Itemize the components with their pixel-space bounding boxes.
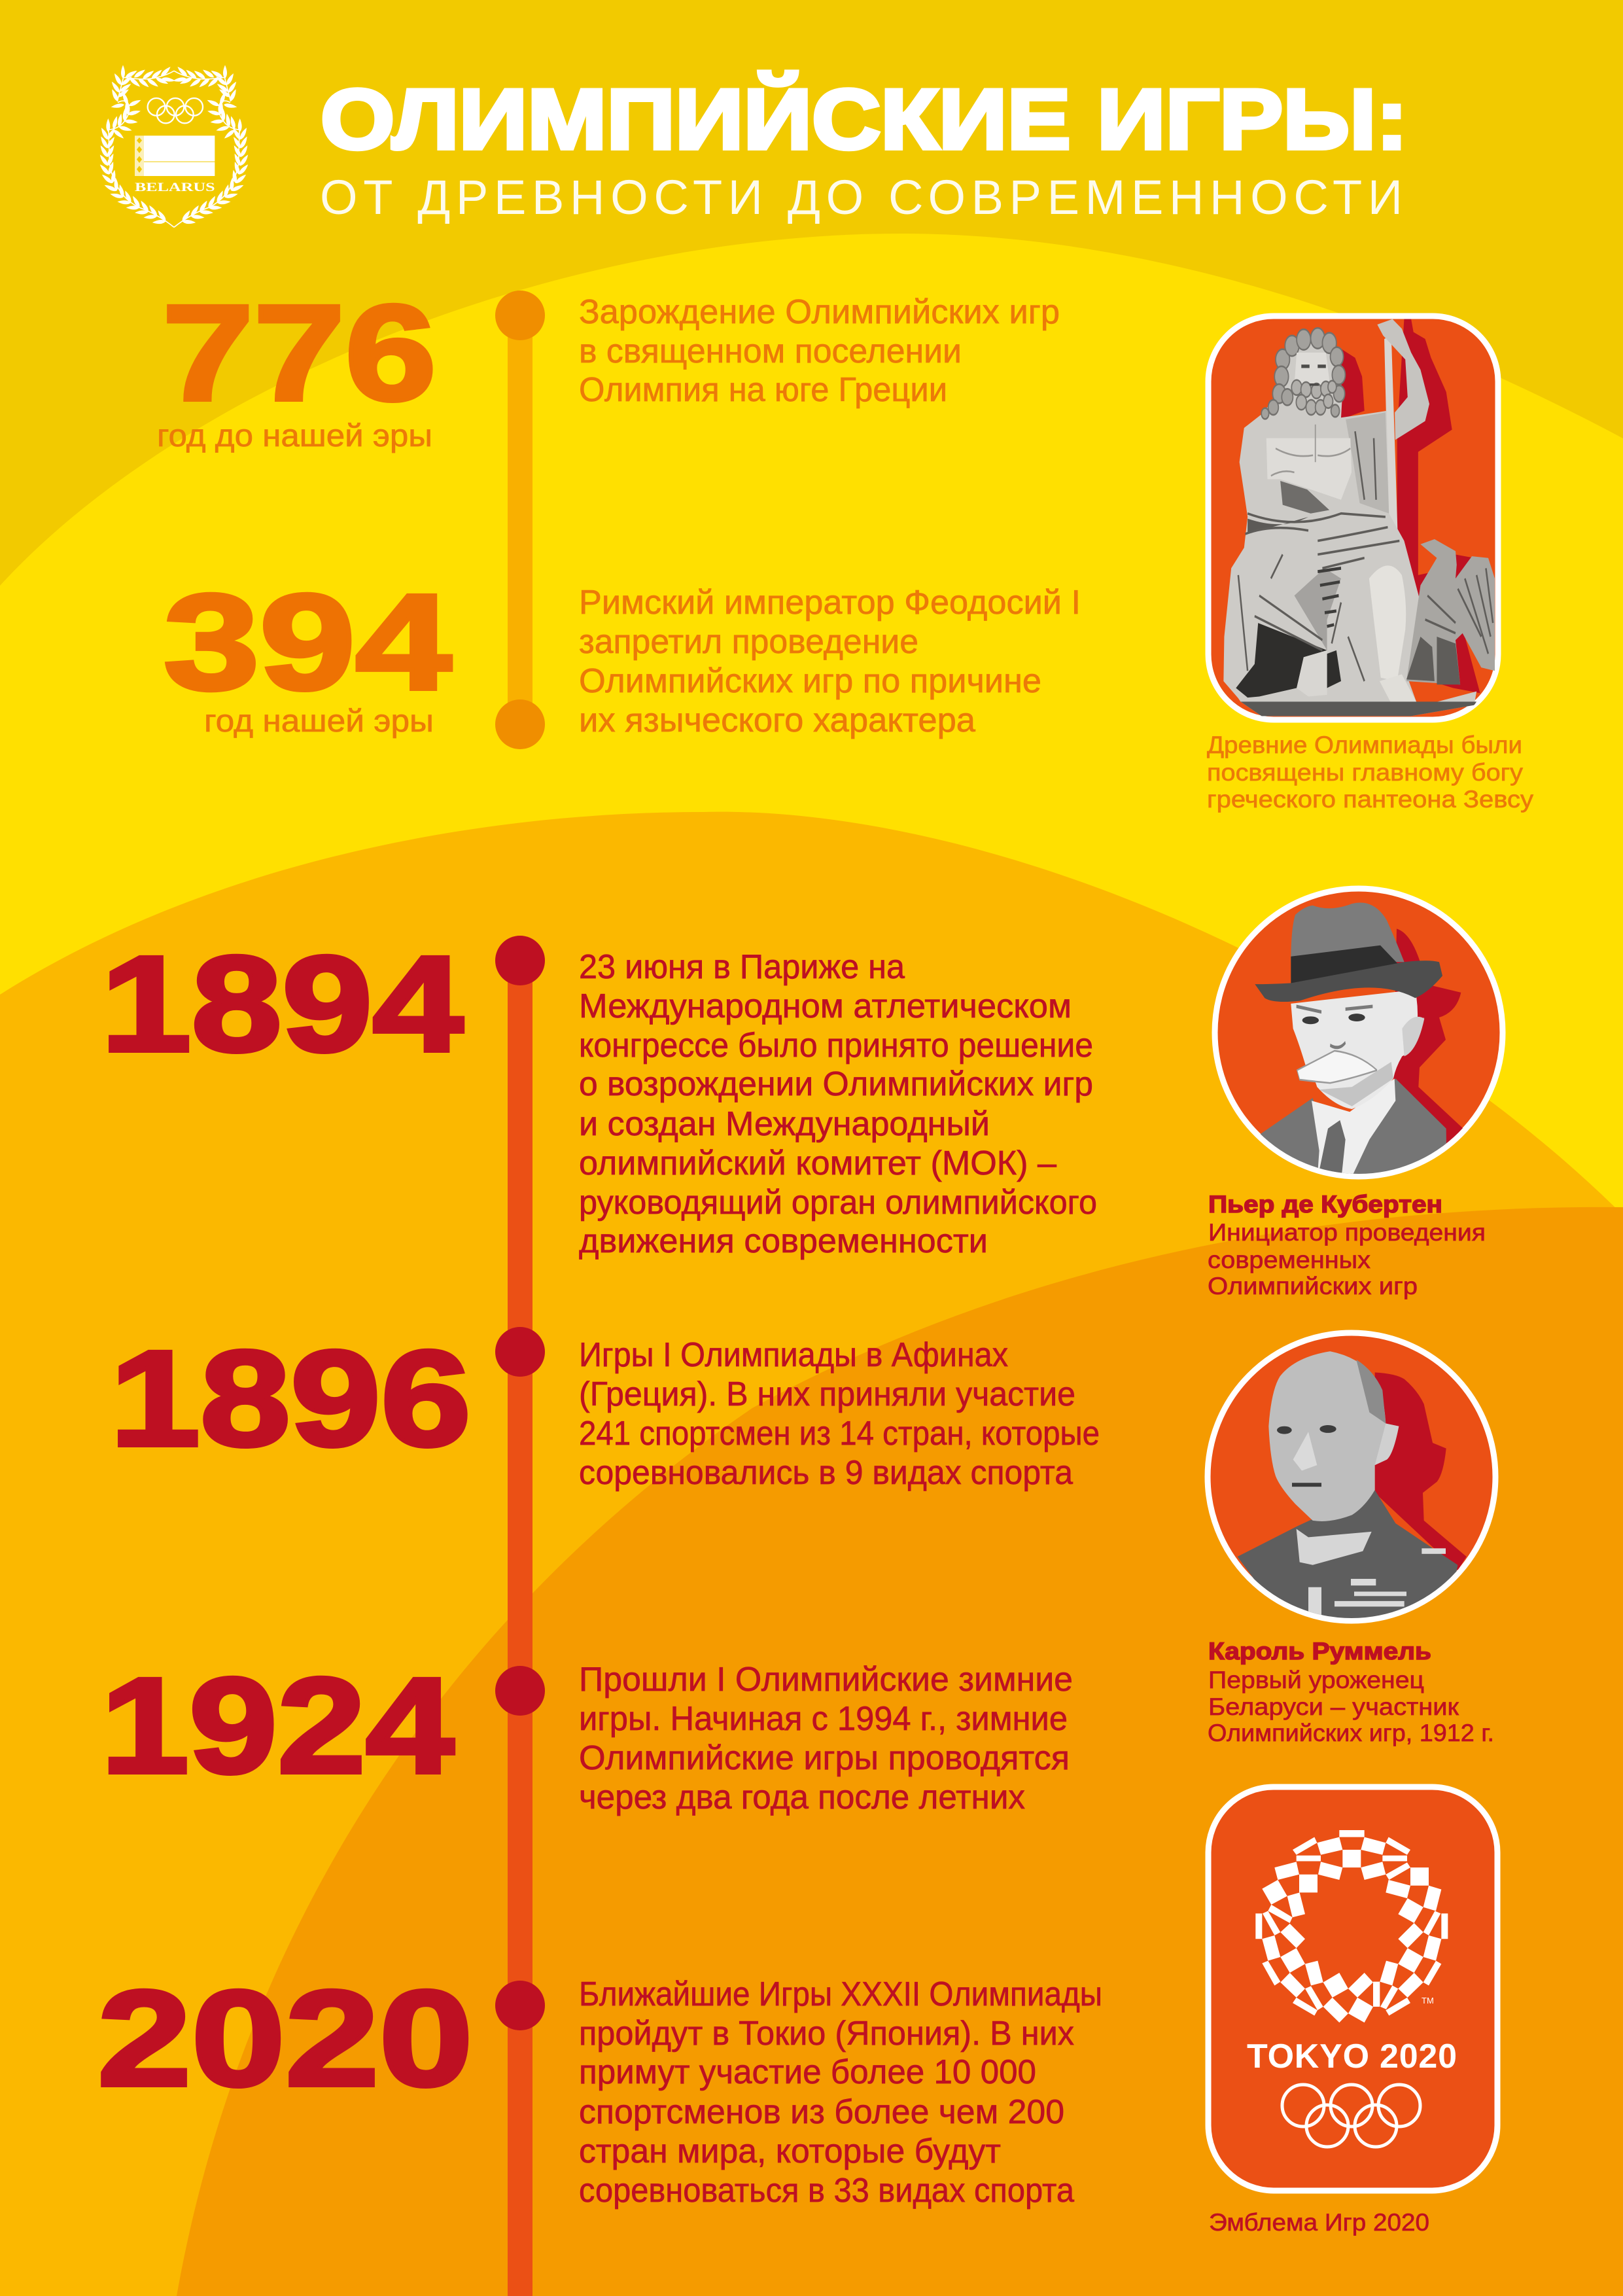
text block 2020	[579, 1975, 1102, 2210]
year 394: 394	[164, 567, 451, 718]
text block 1894: движения современности	[579, 1222, 988, 1260]
caption: Coubertin: современных	[1208, 1246, 1371, 1273]
node 2020	[495, 1981, 545, 2030]
caption: Zeus: посвящены главному богу	[1207, 759, 1524, 786]
year 2020: 2020	[97, 1963, 473, 2115]
text block 1894: Международном атлетическом	[579, 987, 1072, 1025]
title: ОЛИМПИЙСКИЕ ИГРЫ:	[321, 71, 1408, 167]
illustration: Coubertin photo	[1255, 902, 1463, 1181]
subtitle: ОТ ДРЕВНОСТИ ДО СОВРЕМЕННОСТИ	[320, 170, 1403, 224]
text block 1894: и создан Международный	[579, 1105, 990, 1143]
panel: portrait of Karol Rummel	[1208, 1333, 1495, 1623]
text block 1924: через два года после летних	[579, 1778, 1025, 1816]
caption: Rummel: Олимпийских игр, 1912 г.	[1208, 1720, 1494, 1746]
text block 394: запретил проведение	[579, 623, 918, 661]
text block 776	[579, 293, 1060, 409]
timeline bar	[508, 961, 532, 2296]
text block 394	[579, 584, 1081, 739]
caption: Tokyo emblem: Эмблема Игр 2020	[1209, 2209, 1429, 2236]
node 394	[495, 699, 545, 749]
text block 1894: о возрождении Олимпийских игр	[579, 1065, 1093, 1103]
year 1896: 1896	[110, 1323, 471, 1475]
text block 2020: спортсменов из более чем 200	[579, 2093, 1064, 2131]
panel: portrait of Pierre de Coubertin	[1215, 889, 1503, 1181]
year 394 caption: год нашей эры	[204, 704, 434, 739]
node 776	[495, 291, 545, 340]
text block 1894: олимпийский комитет (МОК) –	[579, 1144, 1056, 1182]
illustration: Zeus with eagle	[1223, 319, 1495, 716]
caption: Zeus: Древние Олимпиады были	[1207, 732, 1522, 758]
background: amber wave	[0, 812, 1623, 2296]
text block 2020: Ближайшие Игры XXXII Олимпиады	[579, 1975, 1102, 2013]
text block 1894: 23 июня в Париже на	[579, 948, 905, 986]
timeline: modern era	[495, 936, 545, 2296]
timeline bar	[508, 315, 532, 724]
text block 394: их языческого характера	[579, 701, 975, 739]
text block 1894: руководящий орган олимпийского	[579, 1184, 1097, 1222]
text block 1894	[579, 948, 1097, 1260]
text block 1924: игры. Начиная с 1994 г., зимние	[579, 1700, 1068, 1738]
caption: Coubertin: Олимпийских игр	[1208, 1273, 1418, 1299]
panel: Tokyo 2020 emblem	[1208, 1787, 1497, 2191]
text block 394: Римский император Феодосий I	[579, 584, 1081, 622]
caption: Zeus: греческого пантеона Зевсу	[1207, 786, 1534, 813]
text block 2020: пройдут в Токио (Япония). В них	[579, 2015, 1074, 2053]
timeline: antiquity	[495, 291, 545, 749]
caption: Zeus	[1207, 732, 1534, 813]
year 1894: 1894	[101, 928, 463, 1080]
text block 1896: 241 спортсмен из 14 стран, которые	[579, 1415, 1100, 1453]
text block 2020: примут участие более 10 000	[579, 2053, 1036, 2091]
year 394	[164, 567, 451, 739]
caption: Coubertin: Пьер де Кубертен	[1208, 1191, 1442, 1218]
caption: Coubertin	[1208, 1191, 1486, 1299]
emblem olympic rings	[1282, 2085, 1420, 2147]
caption: Rummel	[1208, 1638, 1494, 1746]
text block 1924	[579, 1661, 1073, 1816]
text block 776: Олимпия на юге Греции	[579, 371, 947, 409]
emblem wordmark: TOKYO 2020	[1247, 2038, 1457, 2075]
title	[320, 71, 1408, 224]
node 1924	[495, 1666, 545, 1716]
text block 1896: Игры I Олимпиады в Афинах	[579, 1336, 1008, 1374]
illustration: Rummel photo	[1238, 1351, 1467, 1623]
crest olympic rings	[148, 98, 203, 123]
crest laurel wreath	[98, 65, 250, 227]
text block 394: Олимпийских игр по причине	[579, 662, 1041, 700]
crest label: BELARUS	[135, 181, 215, 194]
text block 1894: конгрессе было принято решение	[579, 1027, 1093, 1065]
caption: Rummel: Кароль Руммель	[1208, 1638, 1431, 1665]
text block 1924: Прошли I Олимпийские зимние	[579, 1661, 1073, 1699]
node 1894	[495, 936, 545, 985]
text block 776: Зарождение Олимпийских игр	[579, 293, 1060, 331]
text block 1896: (Греция). В них приняли участие	[579, 1375, 1075, 1413]
node 1896	[495, 1327, 545, 1377]
trademark mark: TM	[1422, 1996, 1434, 2005]
text block 2020: соревноваться в 33 видах спорта	[579, 2172, 1074, 2210]
caption: Coubertin: Инициатор проведения	[1208, 1219, 1486, 1246]
year 776 caption: год до нашей эры	[157, 419, 432, 453]
text block 1924: Олимпийские игры проводятся	[579, 1739, 1070, 1777]
crest flag	[135, 135, 215, 176]
panel: Zeus statue	[1208, 316, 1498, 720]
text block 776: в священном поселении	[579, 332, 962, 370]
background: orange wave	[177, 1207, 1623, 2296]
year 1924: 1924	[101, 1650, 454, 1802]
emblem: Belarus Olympic Committee crest	[98, 65, 250, 227]
caption: Rummel: Беларуси – участник	[1208, 1693, 1459, 1720]
text block 1896	[579, 1336, 1100, 1492]
text block 2020: стран мира, которые будут	[579, 2132, 1001, 2170]
icon: checkered wreath	[1255, 1830, 1448, 2022]
text block 1896: соревновались в 9 видах спорта	[579, 1454, 1073, 1492]
year 776: 776	[162, 277, 436, 429]
caption: Rummel: Первый уроженец	[1208, 1667, 1424, 1693]
